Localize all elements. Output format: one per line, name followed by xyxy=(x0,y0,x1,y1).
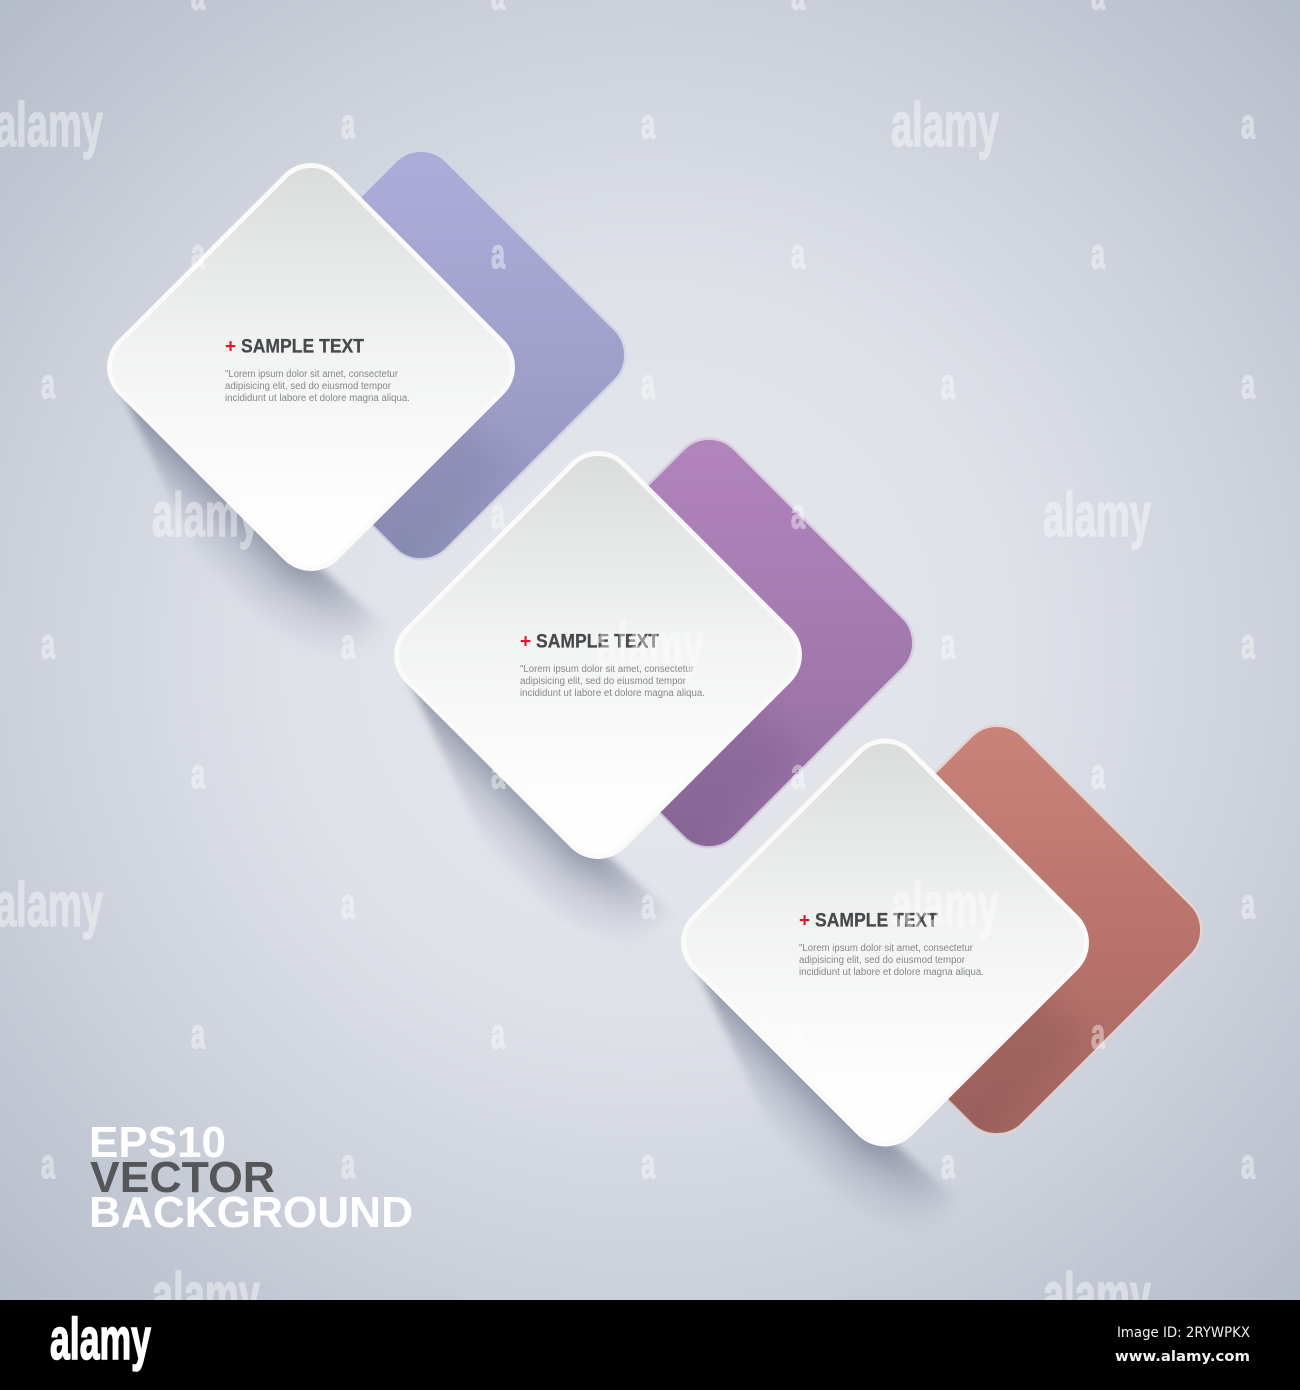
watermark overlay: a xyxy=(1241,880,1255,927)
watermark overlay: alamy xyxy=(891,871,999,940)
watermark overlay: a xyxy=(1091,1010,1105,1057)
watermark overlay: a xyxy=(41,360,55,407)
watermark overlay: a xyxy=(641,100,655,147)
long shadow: step 2 xyxy=(406,684,664,933)
long shadow: step 1 xyxy=(120,396,376,644)
body copy xyxy=(799,943,984,978)
watermark overlay: a xyxy=(341,880,355,927)
title: EPS10 vector background: VECTOR xyxy=(90,1153,275,1202)
body copy: adipisicing elit, sed do eiusmod tempor xyxy=(799,955,966,966)
watermark overlay: a xyxy=(341,620,355,667)
watermark overlay: a xyxy=(641,1140,655,1187)
step 2: purple diamond card xyxy=(394,438,914,933)
watermark overlay: a xyxy=(191,230,205,277)
watermark overlay: a xyxy=(191,1010,205,1057)
watermark overlay: alamy xyxy=(596,611,704,680)
watermark overlay: a xyxy=(1241,100,1255,147)
alamy logo: alamy xyxy=(50,1307,151,1372)
watermark overlay: a xyxy=(941,620,955,667)
text block: step 3 xyxy=(799,910,984,978)
white front diamond xyxy=(382,439,814,871)
body copy: incididunt ut labore et dolore magna aliqua. xyxy=(520,688,705,699)
body copy: "Lorem ipsum dolor sit amet, consectetur xyxy=(799,943,974,954)
watermark overlay: a xyxy=(641,880,655,927)
colored back diamond: red xyxy=(934,724,1202,1136)
body copy: incididunt ut labore et dolore magna aliqua. xyxy=(225,393,410,404)
body copy: adipisicing elit, sed do eiusmod tempor xyxy=(225,381,392,392)
watermark overlay: a xyxy=(41,1140,55,1187)
colored back diamond: purple xyxy=(647,438,914,848)
plus marker: + xyxy=(799,910,810,932)
title: EPS10 vector background: EPS10 xyxy=(89,1118,226,1167)
white front diamond xyxy=(669,726,1101,1159)
watermark overlay: alamy xyxy=(152,1261,260,1330)
text block: step 1 xyxy=(225,336,410,404)
watermark overlay: a xyxy=(941,360,955,407)
watermark overlay: a xyxy=(491,230,505,277)
body copy xyxy=(520,664,705,699)
watermark overlay: a xyxy=(341,1140,355,1187)
watermark overlay: alamy xyxy=(0,91,103,160)
watermark overlay: a xyxy=(491,490,505,537)
watermark overlay: alamy xyxy=(891,91,999,160)
text block: step 2 xyxy=(520,632,705,699)
watermark overlay: a xyxy=(791,750,805,797)
body copy: "Lorem ipsum dolor sit amet, consectetur xyxy=(520,664,695,675)
watermark overlay: a xyxy=(1241,360,1255,407)
body copy xyxy=(225,369,410,404)
plus marker: + xyxy=(225,336,236,358)
heading: SAMPLE TEXT xyxy=(241,336,364,358)
white front diamond xyxy=(95,151,527,583)
colored back diamond: blue xyxy=(360,150,626,560)
watermark overlay: a xyxy=(791,1010,805,1057)
watermark overlay: a xyxy=(1241,1140,1255,1187)
heading: SAMPLE TEXT xyxy=(815,910,938,932)
heading: SAMPLE TEXT xyxy=(536,632,659,652)
step 1: blue diamond card xyxy=(107,150,626,644)
watermark overlay: a xyxy=(1241,620,1255,667)
body copy: incididunt ut labore et dolore magna aliqua. xyxy=(799,967,984,978)
watermark overlay: a xyxy=(641,360,655,407)
watermark overlay: a xyxy=(1091,750,1105,797)
long shadow: step 3 xyxy=(694,972,948,1216)
image id: Image ID: 2RYWPKX xyxy=(1117,1325,1250,1341)
title: EPS10 vector background xyxy=(89,1118,413,1237)
watermark overlay: a xyxy=(191,750,205,797)
watermark overlay: a xyxy=(341,100,355,147)
watermark overlay: alamy xyxy=(0,871,103,940)
watermark overlay: a xyxy=(41,620,55,667)
footer bar xyxy=(0,1300,1300,1390)
watermark overlay: a xyxy=(791,230,805,277)
watermark overlay: a xyxy=(491,750,505,797)
title: EPS10 vector background: BACKGROUND xyxy=(89,1188,413,1237)
watermark overlay: alamy xyxy=(152,481,260,550)
watermark overlay: a xyxy=(491,1010,505,1057)
watermark overlay: a xyxy=(1091,230,1105,277)
step 3: red diamond card xyxy=(681,724,1202,1216)
body copy: adipisicing elit, sed do eiusmod tempor xyxy=(520,676,687,687)
watermark overlay: a xyxy=(791,490,805,537)
watermark overlay: alamy xyxy=(1043,481,1151,550)
plus marker: + xyxy=(520,632,531,652)
watermark overlay: a xyxy=(941,1140,955,1187)
website: www.alamy.com xyxy=(1115,1349,1250,1365)
body copy: "Lorem ipsum dolor sit amet, consectetur xyxy=(225,369,399,380)
watermark overlay: alamy xyxy=(1043,1261,1151,1330)
